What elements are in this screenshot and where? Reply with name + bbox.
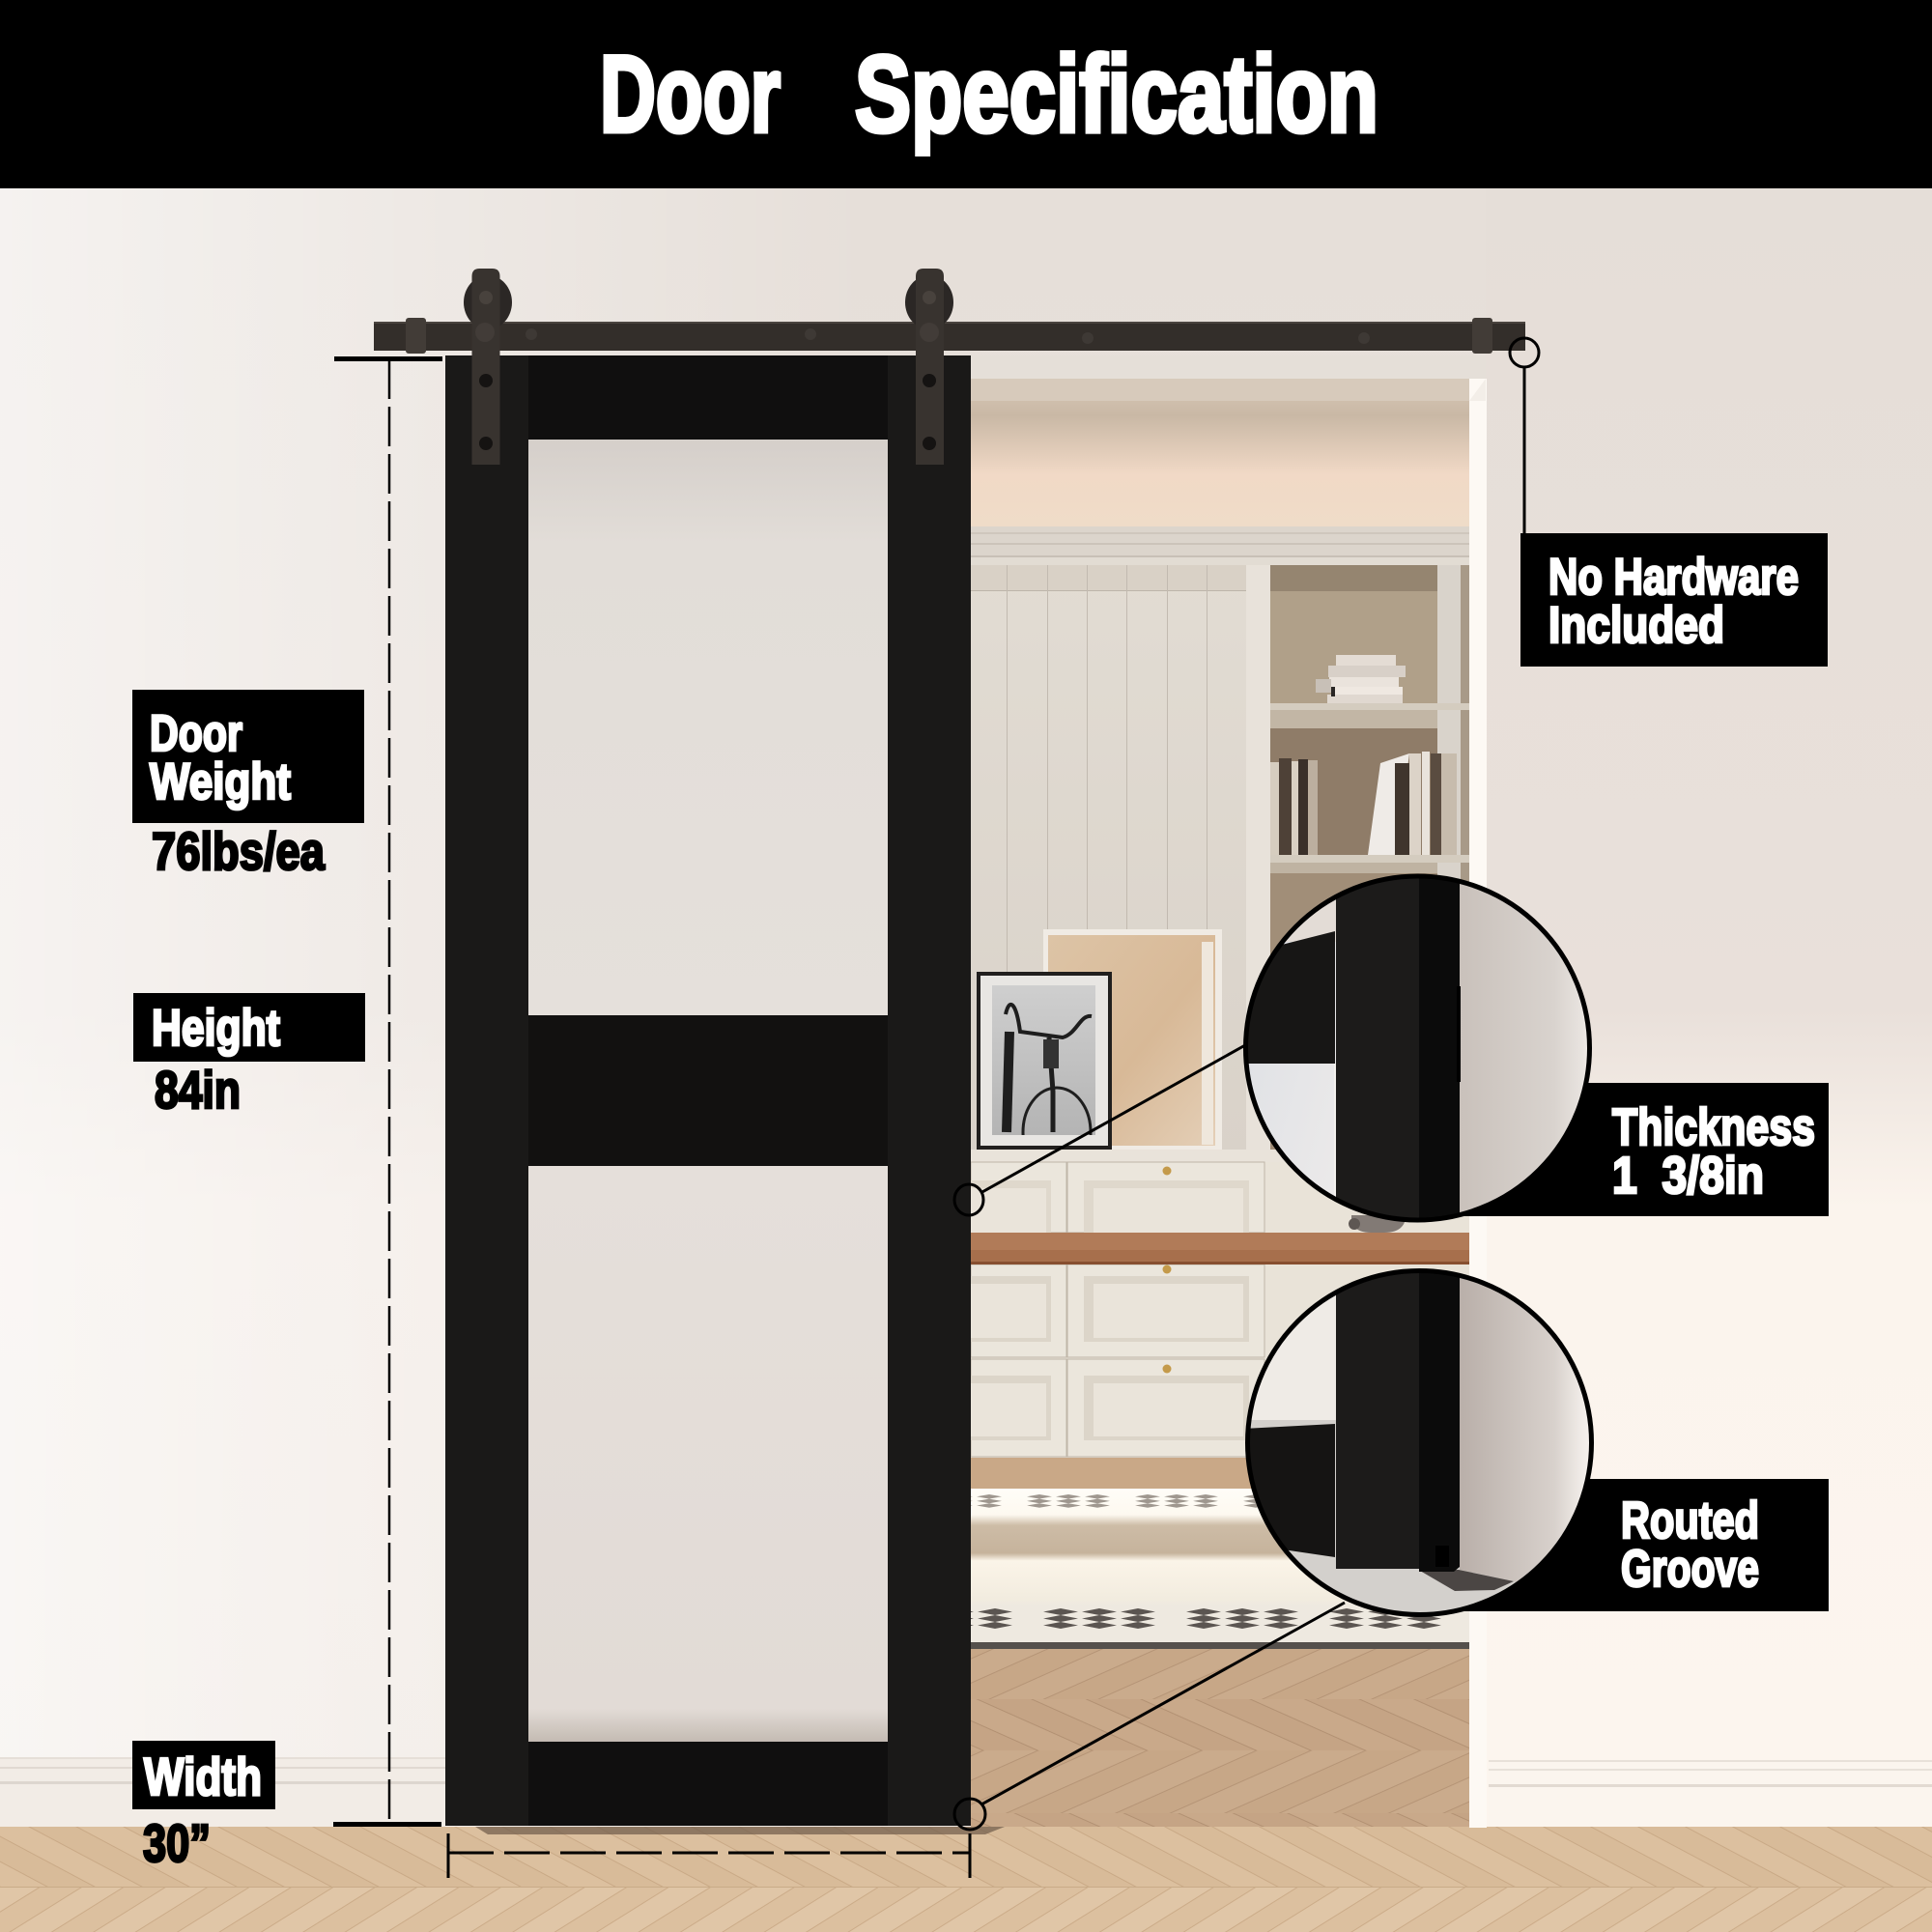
width dimension line — [446, 1833, 972, 1878]
label: thickness — [1449, 1083, 1829, 1216]
framed bicycle photo — [977, 972, 1112, 1150]
label: door weight — [132, 690, 364, 823]
wood counter — [971, 1233, 1469, 1264]
label: height — [133, 993, 365, 1062]
top rail — [528, 355, 888, 440]
magnifier: routed groove detail — [1243, 1269, 1595, 1623]
title — [600, 34, 1378, 155]
middle rail — [528, 1015, 888, 1166]
bottom rail — [528, 1742, 888, 1826]
label: width: Width — [144, 1747, 262, 1806]
magnifier: door edge thickness detail — [1243, 874, 1595, 1223]
label: no hardware included: No Hardware — [1548, 549, 1799, 606]
right baseboard — [1489, 1760, 1932, 1827]
interior floor — [971, 1458, 1469, 1489]
value: height: 84in — [155, 1060, 241, 1120]
door jamb — [971, 355, 1487, 1828]
label: routed groove: Groove — [1621, 1540, 1759, 1598]
title: Specification — [855, 34, 1378, 155]
label: routed groove — [1449, 1479, 1829, 1611]
rug — [971, 1489, 1469, 1649]
framed abstract art — [1043, 929, 1222, 1150]
label: door weight: Door — [150, 705, 242, 762]
left baseboard — [0, 1757, 445, 1827]
label: no hardware included: Included — [1548, 597, 1724, 654]
label: no hardware included — [1520, 533, 1828, 667]
crown moulding — [971, 526, 1469, 557]
hanger strap left — [464, 269, 512, 465]
sliding track rail — [374, 318, 1525, 354]
cabinets — [971, 1162, 1469, 1458]
left stile — [445, 355, 528, 1826]
label: thickness: Thickness — [1612, 1098, 1815, 1156]
bookcase — [1246, 565, 1469, 1164]
doorway soffit — [971, 379, 1469, 401]
interior wood floor — [971, 1649, 1469, 1827]
label: thickness: 1 3/8in — [1612, 1147, 1764, 1205]
frosted glass panels — [528, 440, 888, 1017]
door floor shadow — [475, 1827, 1005, 1834]
hanger strap right — [905, 269, 953, 465]
interior ceiling glow — [971, 379, 1469, 526]
title bar — [0, 0, 1932, 188]
callout marker: thickness — [954, 1045, 1245, 1215]
value: door weight: 76lbs/ea — [152, 821, 325, 881]
credenza ledge — [971, 1150, 1290, 1162]
books: left group — [1270, 758, 1318, 855]
callout marker: hardware — [1510, 338, 1539, 533]
doorway: interior room view — [971, 379, 1469, 1827]
callout marker: routed groove — [954, 1603, 1345, 1830]
height dimension line — [333, 356, 442, 1827]
label: routed groove: Routed — [1621, 1492, 1759, 1549]
right stile — [888, 355, 971, 1826]
floor: herringbone wood — [0, 1827, 1932, 1932]
label: door weight: Weight — [150, 753, 291, 810]
books: stacked — [1316, 655, 1406, 703]
tabletop object — [1349, 1215, 1406, 1233]
books: right group — [1368, 752, 1457, 855]
panelled wall — [971, 557, 1469, 1156]
label: height: Height — [152, 1000, 280, 1057]
value: width: 30” — [143, 1813, 211, 1873]
barn door — [445, 355, 971, 1826]
title: Door — [600, 34, 781, 155]
